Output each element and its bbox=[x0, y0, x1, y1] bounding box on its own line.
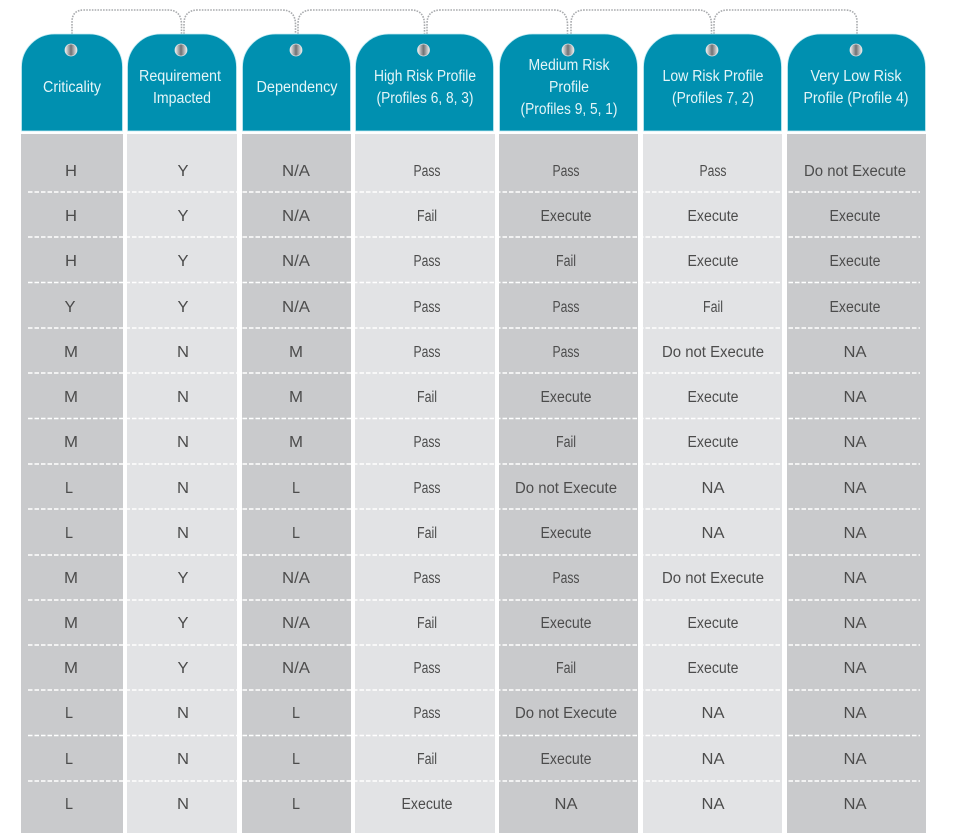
column values: Very Low Risk Profile: Do not Execute bbox=[804, 163, 906, 180]
dotted connectors linking the header tags bbox=[72, 10, 857, 34]
column values: Requirement Impacted: N bbox=[177, 525, 189, 542]
column values: Criticality: M bbox=[64, 389, 78, 406]
column values: Requirement Impacted: N bbox=[177, 389, 189, 406]
column values: Requirement Impacted: N bbox=[177, 344, 189, 361]
column values: Dependency: N/A bbox=[282, 615, 311, 632]
column values: Criticality: L bbox=[65, 751, 73, 768]
header tag: Requirement Impacted bbox=[128, 34, 236, 131]
column values: Low Risk Profile: Execute bbox=[688, 615, 738, 632]
column values: Very Low Risk Profile: NA bbox=[844, 796, 867, 813]
column: Dependency bbox=[242, 34, 351, 833]
column values: Dependency: N/A bbox=[282, 208, 311, 225]
column values: Criticality: L bbox=[65, 796, 73, 813]
column values: Very Low Risk Profile: NA bbox=[844, 389, 867, 406]
column values: Requirement Impacted: N bbox=[177, 480, 189, 497]
column values: Dependency: N/A bbox=[282, 570, 311, 587]
column values: Low Risk Profile: Fail bbox=[703, 299, 723, 316]
header tag: Criticality: Criticality bbox=[43, 79, 101, 96]
column values: Medium Risk Profile: Pass bbox=[552, 570, 580, 587]
column values: Dependency: N/A bbox=[282, 163, 311, 180]
column values: High Risk Profile: Fail bbox=[417, 389, 437, 406]
column values: Medium Risk Profile: Execute bbox=[540, 525, 592, 542]
column values: Low Risk Profile: NA bbox=[702, 796, 725, 813]
column values: High Risk Profile: Pass bbox=[414, 434, 441, 451]
column values: High Risk Profile: Fail bbox=[417, 751, 437, 768]
column values: Low Risk Profile: Do not Execute bbox=[662, 344, 764, 361]
column values: Low Risk Profile: NA bbox=[702, 751, 725, 768]
column values: Low Risk Profile: Do not Execute bbox=[662, 570, 764, 587]
column values: Medium Risk Profile: Execute bbox=[540, 751, 592, 768]
header tag: Low Risk Profile: (Profiles 7, 2) bbox=[672, 90, 754, 107]
column values: Dependency: M bbox=[289, 344, 303, 361]
column values: Criticality: M bbox=[64, 434, 78, 451]
column values: Low Risk Profile: Execute bbox=[688, 660, 738, 677]
header tag: Medium Risk Profile: Medium Risk bbox=[528, 57, 610, 74]
column values: Requirement Impacted: Y bbox=[178, 208, 188, 225]
header tag: High Risk Profile: High Risk Profile bbox=[374, 68, 476, 85]
header tag: Medium Risk Profile: Profile bbox=[549, 79, 589, 96]
column values: Requirement Impacted: N bbox=[177, 796, 189, 813]
column values: Low Risk Profile: Pass bbox=[700, 163, 727, 180]
header tag: Requirement Impacted: Requirement bbox=[139, 68, 222, 85]
column values: Requirement Impacted: N bbox=[177, 705, 189, 722]
header tag: Dependency bbox=[242, 34, 350, 131]
column values: Criticality: M bbox=[64, 570, 78, 587]
column values: Medium Risk Profile: Fail bbox=[556, 660, 576, 677]
column values: High Risk Profile: Pass bbox=[414, 299, 441, 316]
column values: Very Low Risk Profile: Execute bbox=[830, 253, 880, 270]
column: Very Low Risk Profile bbox=[787, 34, 926, 833]
column values: Medium Risk Profile: Do not Execute bbox=[515, 705, 617, 722]
column values: Very Low Risk Profile: NA bbox=[844, 705, 867, 722]
column values: Medium Risk Profile: Pass bbox=[552, 344, 580, 361]
column: Requirement Impacted bbox=[127, 34, 237, 833]
column values: Dependency: L bbox=[292, 796, 300, 813]
column values: Dependency bbox=[242, 134, 351, 833]
column values: High Risk Profile: Pass bbox=[414, 163, 441, 180]
column values: High Risk Profile: Fail bbox=[417, 208, 437, 225]
column values: Criticality: M bbox=[64, 344, 78, 361]
column values: Requirement Impacted: N bbox=[177, 751, 189, 768]
column values: High Risk Profile: Pass bbox=[414, 660, 441, 677]
column values: High Risk Profile: Fail bbox=[417, 525, 437, 542]
column values: Criticality: M bbox=[64, 660, 78, 677]
column values: Medium Risk Profile: Fail bbox=[556, 253, 576, 270]
column values: High Risk Profile: Pass bbox=[414, 480, 441, 497]
column values: Very Low Risk Profile: NA bbox=[844, 480, 867, 497]
column values: Medium Risk Profile bbox=[499, 134, 638, 833]
column values: High Risk Profile: Pass bbox=[414, 570, 441, 587]
column values: Very Low Risk Profile: NA bbox=[844, 751, 867, 768]
column values: Criticality: L bbox=[65, 705, 73, 722]
column values: Dependency: L bbox=[292, 480, 300, 497]
column values: High Risk Profile: Pass bbox=[414, 344, 441, 361]
column values: Criticality: H bbox=[65, 163, 77, 180]
header tag: Low Risk Profile: Low Risk Profile bbox=[662, 68, 764, 85]
column values: Criticality: L bbox=[65, 480, 73, 497]
column values: Low Risk Profile bbox=[643, 134, 782, 833]
column values: Low Risk Profile: NA bbox=[702, 705, 725, 722]
column values: High Risk Profile: Execute bbox=[402, 796, 452, 813]
column values: High Risk Profile: Fail bbox=[417, 615, 437, 632]
column values: Medium Risk Profile: Pass bbox=[552, 299, 580, 316]
column values: Medium Risk Profile: Do not Execute bbox=[515, 480, 617, 497]
column values: Very Low Risk Profile bbox=[787, 134, 926, 833]
column values: Dependency: M bbox=[289, 434, 303, 451]
column values: Low Risk Profile: Execute bbox=[688, 253, 738, 270]
header tag: Very Low Risk Profile: Very Low Risk bbox=[810, 68, 902, 85]
header tag: Criticality bbox=[22, 34, 122, 131]
column values: Requirement Impacted: Y bbox=[178, 163, 188, 180]
header tag: Low Risk Profile bbox=[644, 34, 782, 131]
column: Medium Risk Profile bbox=[499, 34, 638, 833]
column values: Dependency: M bbox=[289, 389, 303, 406]
column values: Requirement Impacted: Y bbox=[178, 253, 188, 270]
column: High Risk Profile bbox=[355, 34, 495, 833]
column values: Very Low Risk Profile: Execute bbox=[830, 299, 880, 316]
column values: Dependency: L bbox=[292, 705, 300, 722]
column values: Requirement Impacted: Y bbox=[178, 299, 188, 316]
column values: Criticality bbox=[21, 134, 123, 833]
column values: Medium Risk Profile: Pass bbox=[552, 163, 580, 180]
column values: Requirement Impacted bbox=[127, 134, 237, 833]
column values: Dependency: L bbox=[292, 525, 300, 542]
header tag: Dependency: Dependency bbox=[256, 79, 338, 96]
column values: Very Low Risk Profile: NA bbox=[844, 660, 867, 677]
column values: Very Low Risk Profile: NA bbox=[844, 570, 867, 587]
column values: Low Risk Profile: Execute bbox=[688, 389, 738, 406]
column values: Medium Risk Profile: Execute bbox=[540, 389, 592, 406]
header tag: Medium Risk Profile: (Profiles 9, 5, 1) bbox=[520, 101, 618, 118]
header tag: Very Low Risk Profile: Profile (Profile 4) bbox=[804, 90, 908, 107]
column values: High Risk Profile: Pass bbox=[414, 253, 441, 270]
column values: Very Low Risk Profile: NA bbox=[844, 615, 867, 632]
column: Low Risk Profile bbox=[643, 34, 782, 833]
column values: Criticality: L bbox=[65, 525, 73, 542]
column values: Medium Risk Profile: NA bbox=[554, 796, 578, 813]
column values: Dependency: N/A bbox=[282, 660, 311, 677]
column values: Requirement Impacted: Y bbox=[178, 660, 188, 677]
column values: Criticality: Y bbox=[64, 299, 76, 316]
header tag: Requirement Impacted: Impacted bbox=[153, 90, 211, 107]
column: Criticality bbox=[21, 34, 123, 833]
column values: Very Low Risk Profile: NA bbox=[844, 344, 867, 361]
column values: Very Low Risk Profile: NA bbox=[844, 525, 867, 542]
column values: Medium Risk Profile: Execute bbox=[540, 615, 592, 632]
column values: Criticality: H bbox=[65, 208, 77, 225]
column values: Requirement Impacted: N bbox=[177, 434, 189, 451]
column values: Requirement Impacted: Y bbox=[178, 615, 188, 632]
header tag: Very Low Risk Profile bbox=[788, 34, 926, 131]
column values: Criticality: M bbox=[64, 615, 78, 632]
column values: Medium Risk Profile: Fail bbox=[556, 434, 576, 451]
column values: Low Risk Profile: NA bbox=[702, 525, 725, 542]
header tag: High Risk Profile: (Profiles 6, 8, 3) bbox=[376, 90, 474, 107]
column values: Low Risk Profile: NA bbox=[702, 480, 725, 497]
column values: Criticality: H bbox=[65, 253, 77, 270]
column values: Requirement Impacted: Y bbox=[178, 570, 188, 587]
header tag: Medium Risk Profile bbox=[500, 34, 638, 131]
column values: High Risk Profile bbox=[355, 134, 495, 833]
column values: Low Risk Profile: Execute bbox=[688, 208, 738, 225]
column values: Very Low Risk Profile: Execute bbox=[830, 208, 880, 225]
column values: Dependency: N/A bbox=[282, 299, 311, 316]
column values: Very Low Risk Profile: NA bbox=[844, 434, 867, 451]
column values: Low Risk Profile: Execute bbox=[688, 434, 738, 451]
column values: Medium Risk Profile: Execute bbox=[540, 208, 592, 225]
column values: Dependency: N/A bbox=[282, 253, 311, 270]
column values: High Risk Profile: Pass bbox=[414, 705, 441, 722]
header tag: High Risk Profile bbox=[356, 34, 494, 131]
column values: Dependency: L bbox=[292, 751, 300, 768]
